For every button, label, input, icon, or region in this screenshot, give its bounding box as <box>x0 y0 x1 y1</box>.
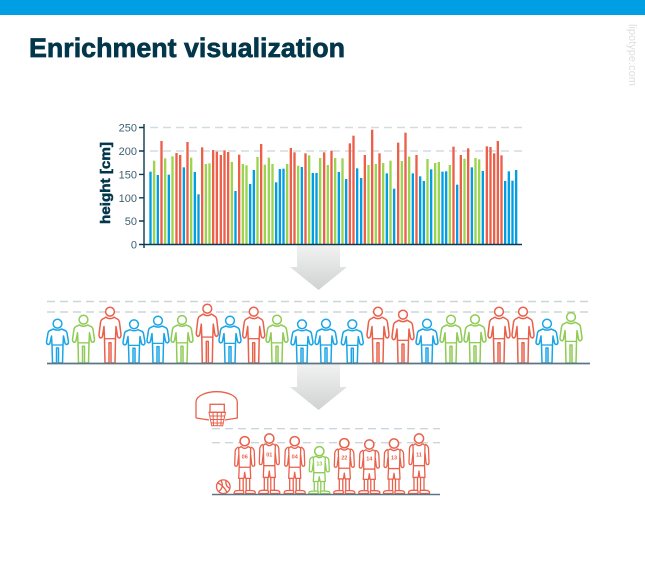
tick labels: 250 <box>119 122 137 134</box>
tick labels: 150 <box>119 170 137 182</box>
players row: 01 <box>266 452 272 458</box>
icon: basketball <box>216 480 230 494</box>
tick labels: 100 <box>119 193 137 205</box>
arrow: chart to population <box>290 245 347 290</box>
top banner <box>0 0 645 15</box>
arrow: population to players <box>290 364 347 410</box>
players row: 13 <box>316 462 322 468</box>
players row <box>212 429 440 494</box>
title: Enrichment visualization <box>29 33 345 63</box>
bar chart <box>97 122 522 252</box>
players row: 06 <box>242 454 248 460</box>
bars <box>149 130 517 244</box>
players row: 13 <box>391 456 397 462</box>
players row: 14 <box>366 456 373 462</box>
y axis label: height [cm] <box>97 142 113 224</box>
tick labels <box>119 122 137 252</box>
axes <box>139 124 522 248</box>
tick labels: 0 <box>131 240 137 252</box>
players row: 04 <box>292 454 299 460</box>
players row: 11 <box>416 452 422 458</box>
tick labels: 50 <box>125 216 137 228</box>
population row <box>46 302 590 364</box>
tick labels: 200 <box>119 146 137 158</box>
watermark: lipotype.com <box>626 24 638 86</box>
icon: basketball hoop <box>196 392 237 426</box>
players row: 22 <box>341 456 347 462</box>
